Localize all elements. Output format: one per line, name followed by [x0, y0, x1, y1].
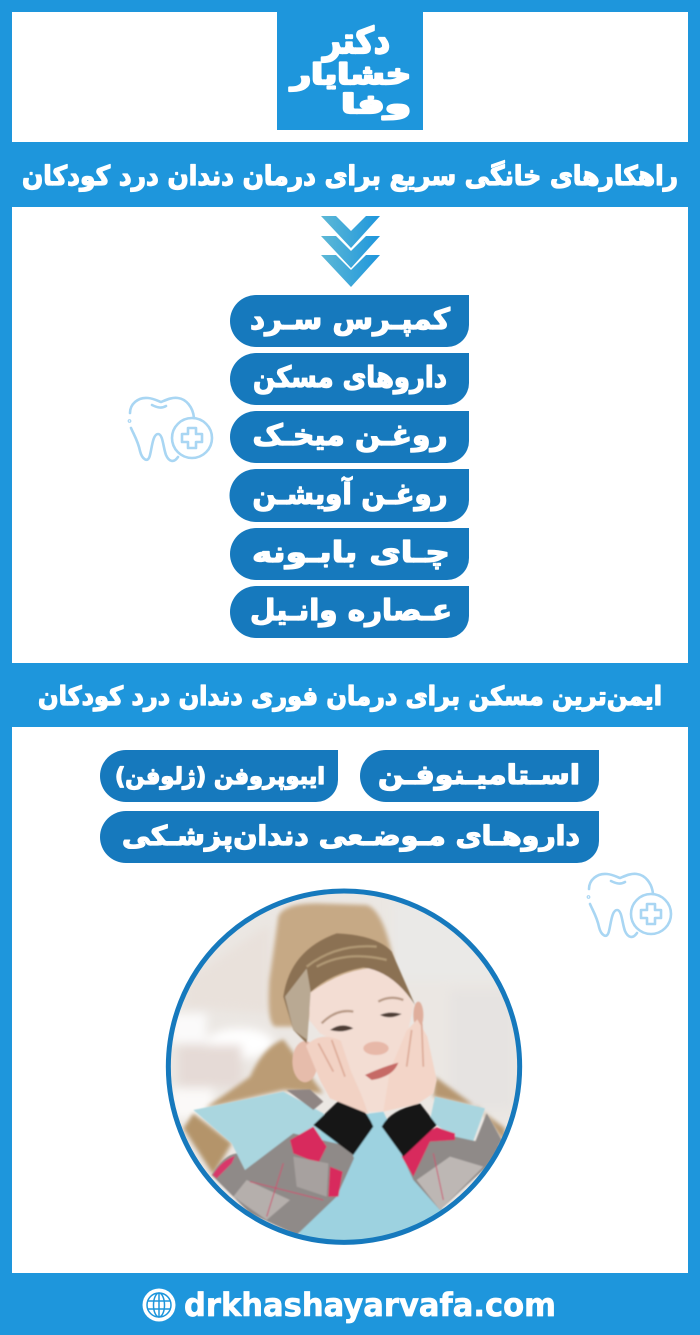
list item: vanilla extract: عـصاره وانـیل: [250, 593, 452, 627]
icon: triple chevron arrow: [321, 216, 380, 287]
icon: tooth with plus: [588, 874, 671, 937]
icon: globe: [142, 1288, 176, 1322]
footer: website: [142, 1286, 556, 1324]
logo: دکتر: [321, 21, 390, 62]
list item: clove oil: روغـن میخـک: [252, 418, 448, 452]
list item: vanilla extract: [230, 586, 469, 638]
list item: chamomile tea: [230, 528, 469, 580]
icon: tooth with plus: [129, 398, 212, 461]
logo: وفا: [341, 90, 411, 120]
list item: clove oil: [230, 411, 469, 463]
panel: logo header: [12, 12, 688, 142]
list item: cold compress: کمپـرس سـرد: [250, 302, 450, 337]
photo: child with toothache in dental chair: [163, 887, 527, 1250]
pill: topical dental medicines: [100, 811, 599, 863]
logo: خشایار: [289, 58, 411, 91]
panel: painkillers and photo: [12, 727, 688, 1273]
list item: cold compress: [230, 295, 469, 347]
heading: safest painkillers: ایمن‌ترین مسکن برای درمان فوری دندان درد کودکان: [38, 682, 662, 712]
list item: thyme oil: روغـن آویشـن: [252, 476, 448, 511]
photo ring: [168, 891, 520, 1242]
list item: chamomile tea: چـای بابـونه: [252, 535, 450, 570]
logo: [277, 12, 423, 130]
list item: thyme oil: [230, 469, 469, 522]
pill: ibuprofen: ایبوپروفن (ژلوفن): [115, 764, 325, 790]
pill: ibuprofen: [100, 750, 338, 802]
pill: acetaminophen: [360, 750, 599, 802]
list item: painkillers: داروهای مسکن: [253, 360, 447, 394]
pill: acetaminophen: اسـتامیـنوفـن: [378, 760, 580, 791]
panel: home remedies list: [12, 207, 688, 663]
website address: drkhashayarvafa.com: [184, 1286, 556, 1324]
pill: topical dental medicines: داروهـای مـوضـعی دندان‌پزشـکی: [122, 821, 580, 852]
list item: painkillers: [230, 353, 469, 405]
